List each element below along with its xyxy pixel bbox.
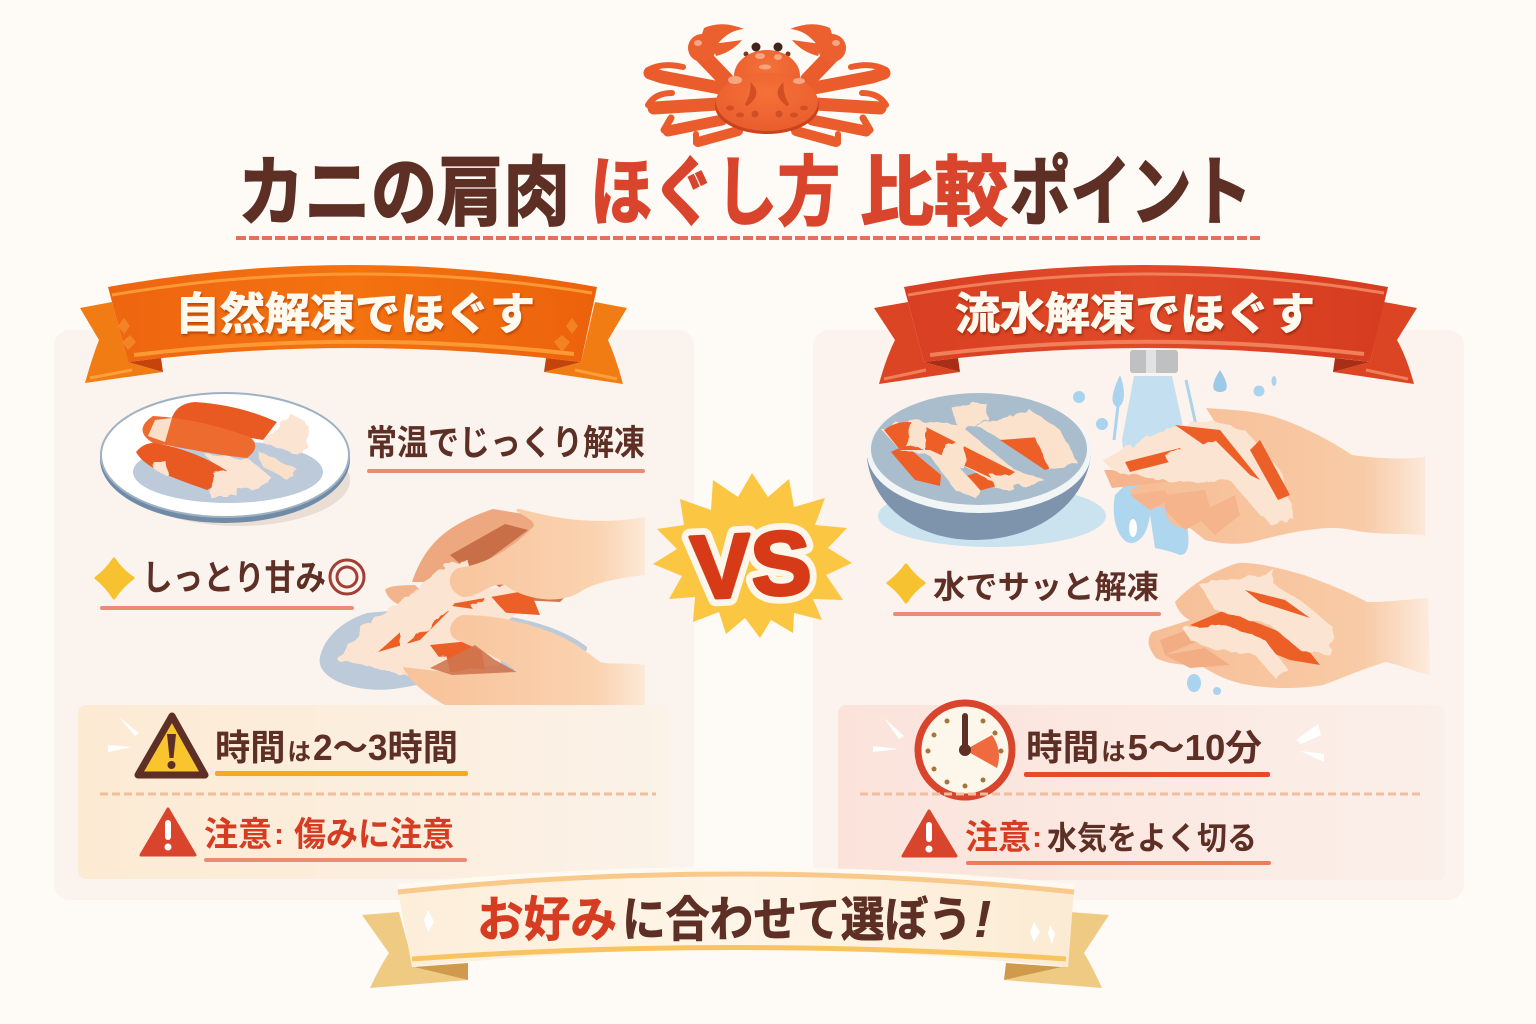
text: caution damage: [204, 816, 467, 862]
text: room temperature thaw: 常温でじっくり解凍: [366, 424, 645, 463]
text: time 2-3 hours: 時間は2〜3時間: [215, 727, 458, 768]
bottom ribbon: [362, 867, 1109, 988]
ribbon: running water heading: [874, 265, 1417, 384]
panel background right: [813, 330, 1464, 900]
bottom ribbon: お好み: [477, 894, 617, 947]
icon: red warning: [141, 809, 195, 855]
ribbon: natural thaw heading: [80, 265, 627, 384]
text: time 5-10 minutes: 時間は5〜10分: [1026, 727, 1262, 768]
box: time and caution: [838, 703, 1445, 880]
text: caution damage: :: [274, 818, 284, 851]
icon: warning triangle: [108, 716, 205, 775]
illustration: hand with crab under water: [1102, 408, 1425, 544]
ribbon: running water heading: 流水解凍でほぐす: [955, 290, 1315, 339]
illustration: plate of crab legs: [100, 393, 350, 526]
icon: clock: [873, 703, 1324, 797]
text: moist sweetness: しっとり甘み: [142, 559, 326, 598]
bottom ribbon: !: [974, 891, 991, 949]
text: quick thaw in water: [888, 565, 1161, 616]
illustration: hands shredding crab: [320, 509, 645, 722]
VS starburst badge: [653, 473, 852, 638]
panel: natural thaw: [54, 265, 694, 900]
title: カニの肩肉: [238, 151, 570, 236]
title: [238, 151, 1252, 236]
text: caution drain water: [965, 819, 1271, 865]
text: quick thaw in water: 水でサッと解凍: [933, 569, 1159, 605]
VS starburst badge: VS: [689, 513, 814, 619]
bottom ribbon: に合わせて選ぼう: [622, 894, 972, 947]
icon: crab: [648, 24, 886, 143]
text: caution damage: 傷みに注意: [294, 816, 454, 854]
box: time and caution: [78, 705, 670, 879]
VS starburst badge: VS: [689, 513, 814, 619]
title: ポイント: [1010, 151, 1252, 236]
title: ほぐし方: [590, 151, 840, 236]
title underline: [236, 236, 1260, 240]
illustration: bowl of crab in water: [867, 393, 1106, 547]
illustration: faucet and water: [1073, 350, 1276, 555]
ribbon: natural thaw heading: 自然解凍でほぐす: [175, 290, 535, 339]
text: moist sweetness: [96, 559, 364, 610]
icon: red warning: [903, 811, 956, 856]
text: caution drain water: :: [1032, 821, 1042, 854]
title: 比較: [860, 151, 1008, 236]
text: caution drain water: 水気をよく切る: [1047, 820, 1257, 856]
panel: running water thaw: [813, 265, 1464, 900]
panel background left: [54, 330, 694, 900]
text: caution damage: 注意: [204, 816, 272, 854]
text: caution drain water: 注意: [965, 819, 1031, 857]
illustration: hand holding shredded crab: [1149, 563, 1430, 695]
